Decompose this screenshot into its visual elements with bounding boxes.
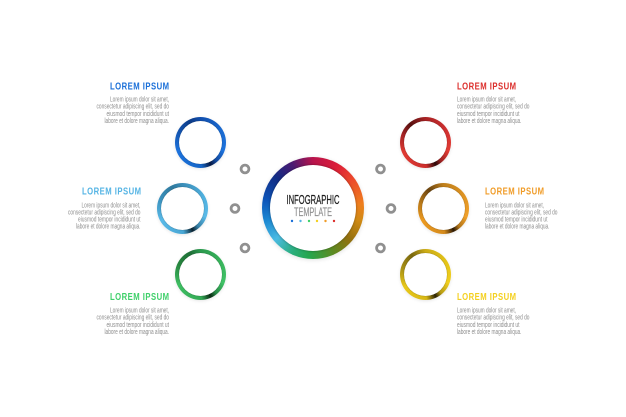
text block: light blue: consectetur adipiscing elit, sed do — [68, 209, 141, 216]
text block: yellow: labore et dolore magna aliqua. — [457, 329, 522, 336]
text block: light blue: Lorem ipsum dolor sit amet, — [82, 202, 141, 209]
heading: orange: LOREM IPSUM — [485, 186, 544, 198]
heading: light blue: LOREM IPSUM — [82, 186, 142, 198]
panel: light blue step — [68, 178, 212, 238]
text block: blue — [96, 97, 169, 125]
icon: green ring — [170, 244, 230, 304]
title: TEMPLATE — [294, 207, 332, 219]
text block: green: eiusmod tempor incididunt ut — [106, 322, 169, 329]
text block: red — [457, 97, 530, 125]
panel: orange step — [413, 178, 558, 238]
heading: blue: LOREM IPSUM — [110, 82, 170, 92]
icon: yellow ring — [395, 244, 455, 304]
step colour dots — [291, 220, 335, 222]
text block: orange: eiusmod tempor incididunt ut — [485, 216, 548, 224]
panel: green step — [96, 244, 230, 336]
text block: blue: eiusmod tempor incididunt ut — [106, 111, 169, 118]
text block: red: consectetur adipiscing elit, sed do — [457, 104, 530, 111]
heading: yellow: LOREM IPSUM — [457, 292, 516, 303]
text block: yellow: Lorem ipsum dolor sit amet, — [457, 308, 516, 315]
text block: blue: consectetur adipiscing elit, sed do — [96, 104, 169, 111]
text block: green: labore et dolore magna aliqua. — [104, 329, 169, 336]
title: INFOGRAPHIC — [286, 193, 340, 207]
text block: orange: labore et dolore magna aliqua. — [485, 224, 550, 231]
text block: green: Lorem ipsum dolor sit amet, — [110, 308, 169, 315]
text block: green: consectetur adipiscing elit, sed do — [96, 315, 169, 322]
text block: yellow — [457, 308, 530, 336]
icon: connector dots — [231, 165, 395, 252]
title — [286, 193, 340, 219]
icon: blue ring — [170, 112, 230, 172]
panel: central hub — [256, 151, 370, 265]
text block: yellow: eiusmod tempor incididunt ut — [457, 322, 520, 329]
text block: light blue: labore et dolore magna aliqua. — [76, 224, 141, 231]
text block: yellow: consectetur adipiscing elit, sed do — [457, 315, 530, 322]
text block: orange — [485, 202, 558, 231]
text block: orange: Lorem ipsum dolor sit amet, — [485, 202, 544, 209]
icon: orange ring — [413, 178, 473, 238]
text block: orange: consectetur adipiscing elit, sed do — [485, 209, 558, 216]
icon: red ring — [395, 112, 455, 172]
heading: red: LOREM IPSUM — [457, 82, 516, 92]
panel: red step — [395, 82, 530, 172]
text block: blue: labore et dolore magna aliqua. — [104, 118, 169, 125]
text block: light blue: eiusmod tempor incididunt ut — [78, 216, 141, 224]
icon: light blue ring — [152, 178, 212, 238]
text block: light blue — [68, 202, 141, 231]
heading: green: LOREM IPSUM — [110, 292, 170, 303]
text block: red: Lorem ipsum dolor sit amet, — [457, 97, 516, 104]
text block: green — [96, 308, 169, 336]
text block: red: eiusmod tempor incididunt ut — [457, 111, 520, 118]
text block: blue: Lorem ipsum dolor sit amet, — [110, 97, 169, 104]
panel: yellow step — [395, 244, 530, 336]
panel: blue step — [96, 82, 230, 172]
text block: red: labore et dolore magna aliqua. — [457, 118, 522, 125]
icon: multicolour ring — [256, 151, 370, 265]
